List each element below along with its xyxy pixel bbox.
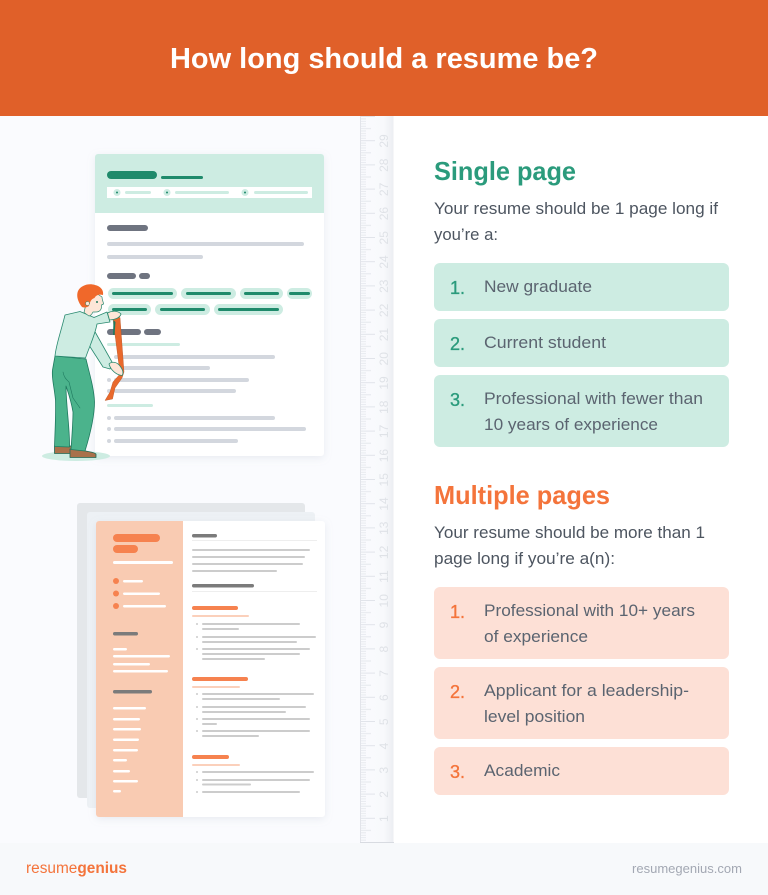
logo: resumegenius [26, 860, 127, 877]
website: resumegenius.com [632, 861, 742, 876]
illustration: single page resume [95, 154, 324, 456]
ruler numbers [377, 134, 391, 822]
neck and face [84, 293, 104, 316]
back sheets [77, 503, 315, 808]
ruler numbers: 4 [377, 742, 391, 749]
list item 3: 3. [450, 390, 465, 410]
shoes [54, 446, 96, 458]
front sheet [96, 521, 325, 817]
hands [108, 311, 123, 376]
title: How long should a resume be? [170, 43, 598, 75]
ruler numbers: 20 [377, 352, 391, 365]
tape tag [113, 320, 116, 335]
header banner [0, 0, 768, 116]
ruler numbers: 29 [377, 134, 391, 148]
intro text: single page: you’re a: [434, 226, 498, 244]
tape measure [105, 318, 124, 400]
ruler numbers: 12 [377, 545, 391, 559]
ruler numbers: 6 [377, 694, 391, 701]
ruler numbers: 16 [377, 449, 391, 462]
ruler numbers: 3 [377, 767, 391, 774]
ruler numbers: 21 [377, 328, 391, 341]
ruler numbers: 5 [377, 718, 391, 725]
list item 2 [434, 667, 729, 739]
intro text: multiple pages: page long if you’re a(n): [434, 550, 615, 568]
list item 2: 2. [450, 682, 465, 702]
list item 2: level position [484, 708, 585, 726]
back arm [87, 330, 112, 369]
ground shadow [42, 451, 110, 461]
illustration: man measuring resume with tape [42, 284, 124, 461]
left panel background [0, 116, 393, 843]
footer [0, 843, 768, 895]
intro text: single page [434, 200, 718, 244]
list item 1: Professional with 10+ years [484, 602, 695, 620]
ruler numbers: 14 [377, 497, 391, 511]
list item 2: 2. [450, 334, 465, 354]
hair [77, 284, 103, 308]
intro text: multiple pages: Your resume should be more than 1 [434, 524, 705, 542]
ruler numbers: 17 [377, 424, 391, 438]
ruler numbers: 15 [377, 473, 391, 486]
trousers [52, 356, 94, 451]
list item 1 [434, 263, 729, 311]
heading: single page: Single page [434, 156, 576, 186]
ruler numbers: 24 [377, 255, 391, 269]
list item 3: Academic [484, 762, 560, 780]
eye [96, 301, 98, 303]
section: multiple pages [434, 480, 729, 795]
ruler numbers: 9 [377, 621, 391, 628]
resume sidebar [96, 521, 183, 817]
list item 3: 10 years of experience [484, 416, 658, 434]
ruler numbers: 1 [377, 815, 391, 822]
ruler numbers: 8 [377, 646, 391, 653]
list item 2: Applicant for a leadership- [484, 682, 689, 700]
list item 1: of experience [484, 628, 588, 646]
ruler numbers: 18 [377, 400, 391, 414]
list item 3: 3. [450, 762, 465, 782]
intro text: multiple pages [434, 524, 705, 568]
list item 3 [434, 375, 729, 447]
list item 3: Professional with fewer than [484, 390, 703, 408]
ruler numbers: 11 [377, 570, 391, 583]
list item 1: New graduate [484, 278, 592, 296]
ruler numbers: 25 [377, 231, 391, 244]
list item 2: Current student [484, 334, 606, 352]
ruler numbers: 13 [377, 521, 391, 535]
ruler numbers: 27 [377, 182, 391, 196]
section: single page [434, 156, 729, 447]
list item 3 [434, 747, 729, 795]
ruler numbers: 28 [377, 158, 391, 172]
ruler numbers: 7 [377, 670, 391, 677]
ruler numbers: 26 [377, 207, 391, 220]
list item 2 [434, 319, 729, 367]
illustration: multi-page resume [77, 503, 325, 817]
ruler numbers: 10 [377, 594, 391, 607]
list item 1: 1. [450, 278, 465, 298]
intro text: single page: Your resume should be 1 page long if [434, 200, 718, 218]
ruler numbers: 23 [377, 279, 391, 293]
resume main column [192, 534, 317, 793]
shirt [55, 312, 110, 358]
ruler numbers: 2 [377, 791, 391, 798]
list item 1: 1. [450, 602, 465, 622]
trouser fold [63, 372, 80, 408]
ear [86, 302, 90, 306]
ruler numbers: 22 [377, 303, 391, 317]
heading: multiple pages: Multiple pages [434, 480, 610, 510]
ruler numbers: 19 [377, 376, 391, 390]
list item 1 [434, 587, 729, 659]
ruler [360, 116, 394, 843]
